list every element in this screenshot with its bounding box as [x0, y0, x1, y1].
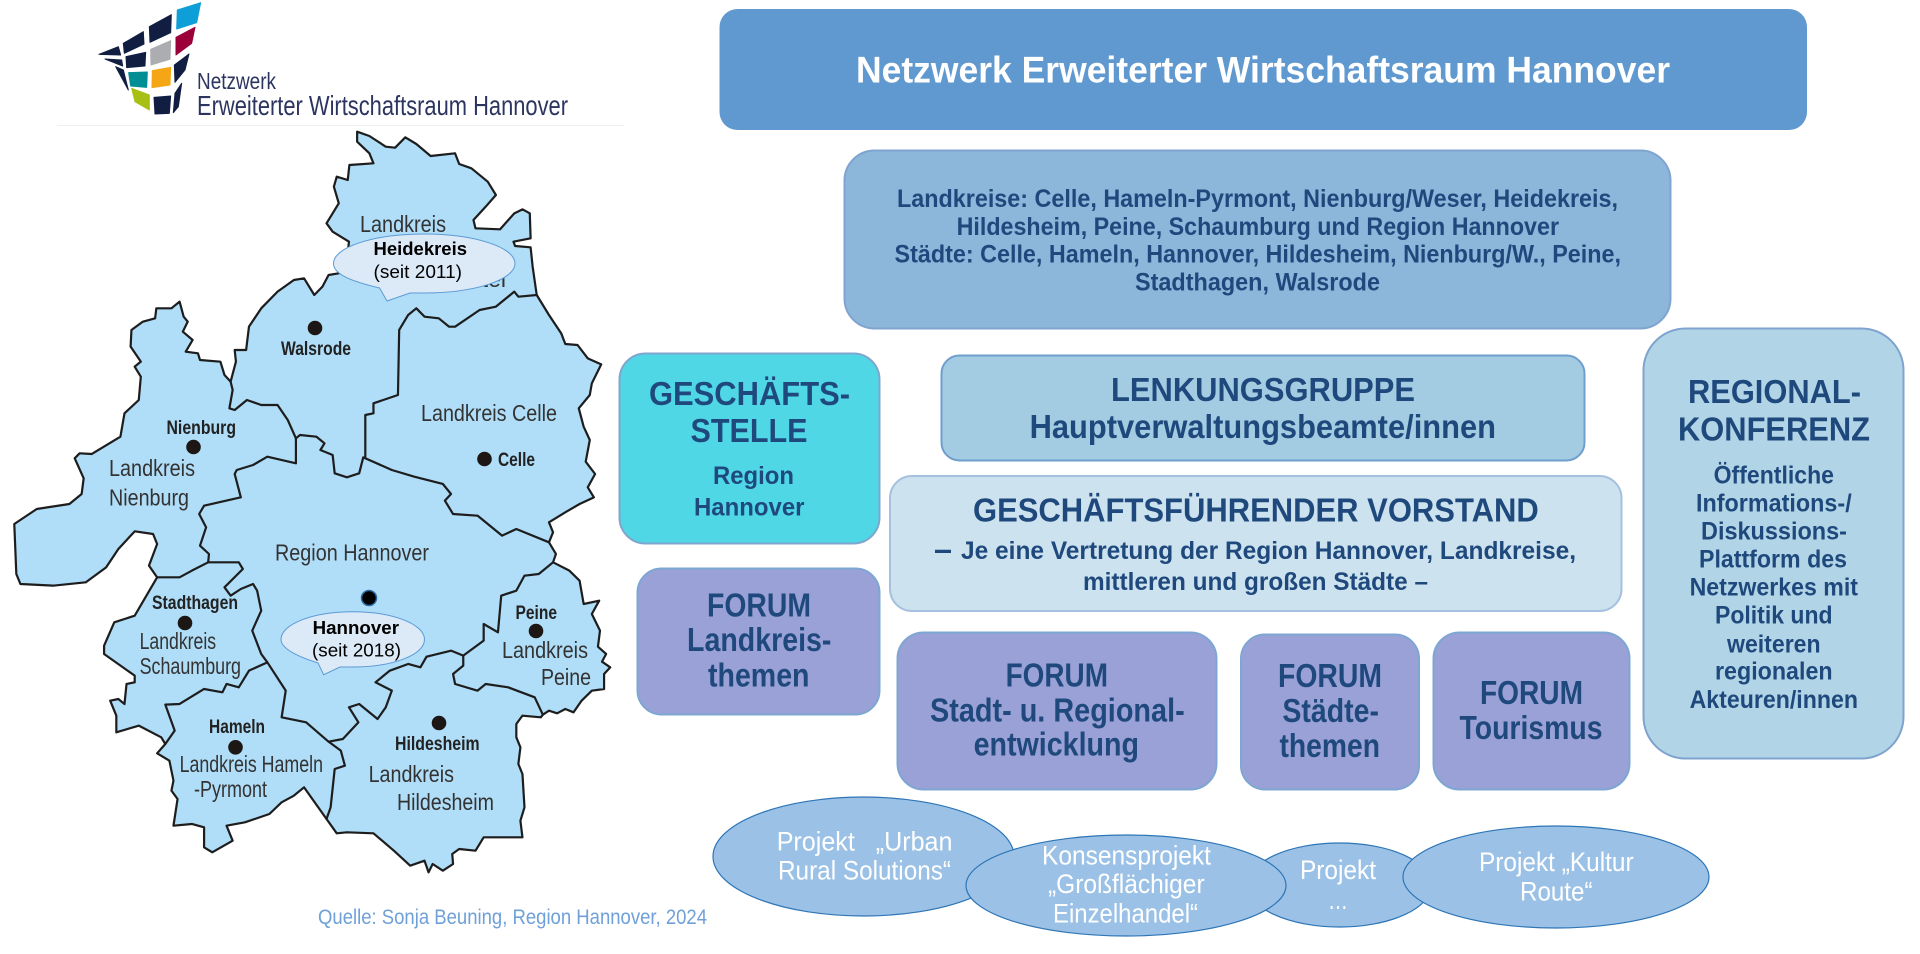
text: members list: Städte: Celle, Hameln, Hannover, Hildesheim, Nienburg/W., Peine, — [894, 241, 1621, 269]
text: members list: Stadthagen, Walsrode — [1135, 269, 1380, 297]
heading: themen — [708, 657, 810, 694]
heading — [1678, 373, 1870, 448]
text: Vorstand description: mittleren und großen Städte – — [1083, 568, 1428, 596]
city: Nienburg: Nienburg — [166, 418, 236, 439]
panel: Geschäftsführender Vorstand — [890, 476, 1622, 611]
callout: Hannover seit 2018: Hannover — [313, 618, 399, 638]
icon: network logo mark — [99, 3, 201, 114]
logo text: Erweiterter Wirtschaftsraum Hannover — [197, 90, 568, 121]
heading: FORUM — [1480, 674, 1583, 711]
map label: Landkreis Hildesheim: Hildesheim — [397, 789, 494, 815]
map label: Landkreis Schaumburg: Landkreis — [140, 628, 216, 654]
callout: Heidekreis seit 2011: Heidekreis — [374, 239, 467, 259]
map label: Landkreis Celle: Landkreis Celle — [421, 400, 557, 426]
text: members list: Hildesheim, Peine, Schaumburg und Region Hannover — [957, 213, 1559, 241]
project: Urban Rural Solutions: Rural Solutions“ — [778, 856, 951, 886]
callout: Heidekreis seit 2011: (seit 2011) — [374, 262, 462, 282]
city dot: Hannover — [362, 590, 376, 606]
heading: Hauptverwaltungsbeamte/innen — [1030, 408, 1496, 445]
heading — [649, 375, 850, 449]
title banner — [720, 9, 1807, 130]
map label: Landkreis Schaumburg: Schaumburg — [140, 653, 241, 679]
panel: Forum Tourismus — [1434, 632, 1630, 790]
logo text — [197, 68, 568, 121]
text: description: Netzwerkes mit — [1690, 574, 1859, 602]
map label: Landkreis Nienburg: Landkreis — [109, 455, 195, 481]
text: Region Hannover: Region — [713, 462, 794, 490]
heading: Städte- — [1282, 692, 1379, 729]
project: Urban Rural Solutions: Projekt „Urban — [777, 827, 952, 857]
panel: Regionalkonferenz — [1644, 328, 1904, 758]
project: Kultur Route: Projekt „Kultur — [1479, 847, 1634, 877]
map label: Landkreis Hameln-Pyrmont: Landkreis Hameln — [180, 751, 323, 777]
city: Celle: Celle — [498, 450, 535, 471]
heading: themen — [1280, 727, 1380, 764]
logo text: Netzwerk — [197, 68, 276, 94]
city: Hameln: Hameln — [209, 717, 265, 738]
map label: Region Hannover: Region Hannover — [275, 540, 429, 566]
panel: Lenkungsgruppe — [942, 356, 1584, 460]
text: description: Informations-/ — [1696, 490, 1852, 518]
map label: Landkreis Nienburg: Nienburg — [109, 485, 189, 511]
city: Hameln — [209, 717, 265, 755]
heading: Landkreis- — [687, 621, 831, 658]
project: placeholder: … — [1328, 885, 1348, 915]
text: description: Plattform des — [1699, 545, 1847, 573]
text: members list: Landkreise: Celle, Hameln-Pyrmont, Nienburg/Weser, Heidekreis, — [897, 185, 1618, 213]
map label: Landkreis Hameln-Pyrmont — [180, 751, 323, 802]
map label: Landkreis Peine: Peine — [541, 664, 591, 690]
city: Hildesheim: Hildesheim — [395, 734, 480, 755]
heading: STELLE — [690, 412, 808, 449]
project: placeholder: Projekt — [1300, 855, 1376, 885]
city: Walsrode — [281, 321, 351, 360]
project: Kultur Route: Route“ — [1520, 877, 1592, 907]
heading: entwicklung — [974, 726, 1139, 763]
heading: FORUM — [1006, 657, 1108, 694]
project: placeholder — [1248, 843, 1432, 927]
heading — [930, 657, 1185, 763]
panel: Forum Landkreisthemen — [638, 568, 880, 714]
project: Großflächiger Einzelhandel — [966, 835, 1286, 936]
map label: Landkreis Hildesheim — [369, 761, 494, 815]
logo — [99, 3, 568, 121]
text: description: Öffentliche — [1714, 460, 1834, 489]
text: members list — [894, 185, 1621, 297]
project: Kultur Route — [1403, 826, 1709, 928]
map label: Landkreis Peine — [502, 637, 591, 690]
callout: Heidekreis seit 2011 — [334, 234, 515, 301]
callout: Hannover seit 2018 — [281, 612, 424, 675]
project: Großflächiger Einzelhandel: „Großflächiger — [1048, 869, 1205, 899]
heading: REGIONAL- — [1688, 373, 1861, 410]
city: Nienburg — [166, 418, 236, 454]
city: Walsrode: Walsrode — [281, 339, 351, 360]
city: Stadthagen — [152, 593, 238, 630]
city: Peine: Peine — [516, 603, 557, 624]
map regions — [14, 132, 610, 872]
map label: Landkreis Peine: Landkreis — [502, 637, 588, 663]
text: Vorstand description: Je eine Vertretung der Region Hannover, Landkreise, — [961, 537, 1576, 565]
heading — [1460, 674, 1602, 746]
heading: LENKUNGSGRUPPE — [1111, 371, 1415, 408]
panel: Forum Stadt- und Regionalentwicklung — [898, 632, 1216, 790]
title: Netzwerk Erweiterter Wirtschaftsraum Hannover — [856, 50, 1670, 91]
city: Stadthagen: Stadthagen — [152, 593, 238, 614]
text: description — [1690, 460, 1859, 714]
map label: Landkreis Nienburg — [109, 455, 195, 511]
project: Großflächiger Einzelhandel: Einzelhandel“ — [1053, 898, 1198, 928]
map of the region — [14, 132, 610, 872]
text: description: regionalen — [1715, 658, 1833, 686]
map label: Landkreis Heidekreis (partly hidden): stel — [470, 266, 506, 292]
map label: Landkreis Hildesheim: Landkreis — [369, 761, 454, 787]
text: description: weiteren — [1726, 630, 1821, 658]
heading: KONFERENZ — [1678, 411, 1870, 448]
map label: Landkreis Heidekreis (partly hidden): Landkreis — [360, 211, 446, 237]
heading — [1030, 371, 1496, 445]
project: Urban Rural Solutions — [713, 797, 1014, 916]
city: Peine — [516, 603, 557, 638]
heading: Stadt- u. Regional- — [930, 691, 1185, 728]
map label: Landkreis Hameln-Pyrmont: -Pyrmont — [194, 776, 267, 802]
panel: members — [844, 150, 1670, 328]
text: Vorstand description — [934, 531, 1576, 596]
text: description: Politik und — [1715, 601, 1833, 629]
text: description: Diskussions- — [1701, 518, 1847, 546]
city: Celle — [477, 450, 535, 471]
heading: Tourismus — [1460, 709, 1602, 746]
text: Region Hannover: Hannover — [694, 494, 805, 522]
text: Region Hannover — [694, 462, 805, 522]
panel: Geschäftsstelle — [620, 354, 880, 544]
map label: Landkreis Heidekreis (partly hidden) — [360, 211, 506, 292]
heading: FORUM — [1278, 657, 1382, 694]
panel: Forum Städtethemen — [1241, 634, 1419, 790]
text: description: Akteuren/innen — [1690, 686, 1858, 714]
heading: GESCHÄFTS- — [649, 375, 850, 412]
map label: Landkreis Schaumburg — [140, 628, 241, 679]
city: Hildesheim — [395, 716, 480, 755]
callout: Hannover seit 2018: (seit 2018) — [312, 641, 401, 661]
text: Vorstand description: – — [934, 531, 952, 567]
heading — [1278, 657, 1382, 764]
source note: Quelle: Sonja Beuning, Region Hannover, 2024 — [318, 906, 707, 929]
heading: FORUM — [707, 587, 811, 624]
heading — [687, 587, 831, 694]
heading: GESCHÄFTSFÜHRENDER VORSTAND — [973, 491, 1539, 528]
project: Großflächiger Einzelhandel: Konsensprojekt — [1042, 841, 1211, 871]
